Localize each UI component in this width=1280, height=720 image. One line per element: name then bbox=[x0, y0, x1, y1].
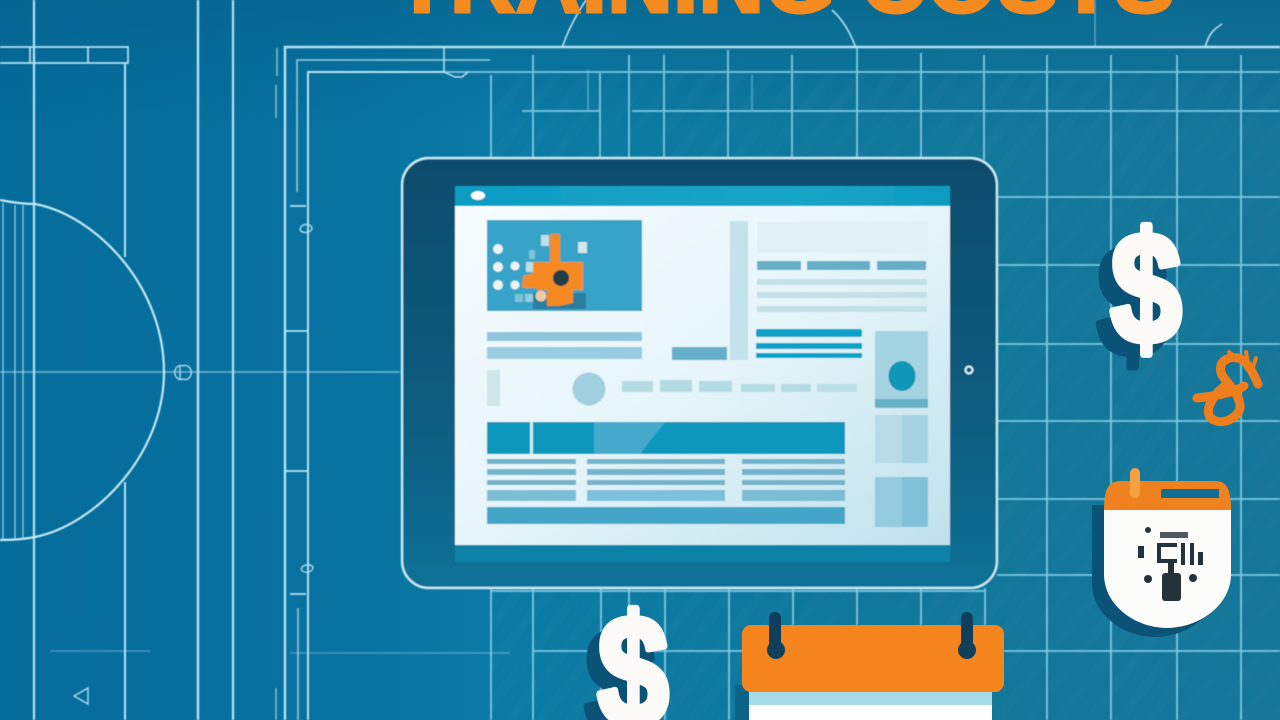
blue banner bbox=[487, 422, 845, 454]
screen bbox=[455, 186, 950, 562]
screen top bar bbox=[455, 186, 950, 207]
icon: large dollar sign right: $ bbox=[1111, 201, 1182, 377]
grid lines bbox=[308, 0, 1280, 720]
tablet bbox=[402, 158, 997, 588]
vertical stripe bbox=[730, 221, 748, 360]
icon: small orange currency symbol bbox=[1197, 352, 1258, 422]
drawing detail marks bbox=[0, 224, 510, 704]
icon: small calendar badge bbox=[1092, 468, 1231, 637]
small icon row bbox=[487, 370, 857, 406]
table rows bbox=[487, 459, 845, 501]
right tab bars bbox=[757, 261, 926, 270]
top bar dot bbox=[471, 191, 485, 200]
icon: large dollar sign right: $ bbox=[1097, 213, 1168, 389]
tag block bbox=[672, 347, 727, 360]
table footer bar bbox=[487, 507, 845, 524]
calendar glyph marks bbox=[1138, 527, 1203, 601]
left plan: vertical lines and top box bbox=[0, 0, 128, 720]
icon: large calendar bbox=[735, 612, 1004, 720]
image tile with gear bbox=[487, 220, 642, 311]
tablet home button bbox=[966, 366, 972, 374]
right heading block bbox=[757, 222, 928, 253]
blue highlight bars bbox=[756, 329, 862, 358]
right text lines bbox=[757, 279, 927, 312]
screen bottom strip bbox=[455, 540, 950, 562]
screen content area bbox=[455, 206, 950, 545]
tablet body bbox=[402, 158, 997, 588]
side cards bbox=[875, 415, 928, 527]
side profile panel bbox=[875, 331, 928, 408]
left plan: semicircular room outline bbox=[0, 200, 164, 540]
left text bars bbox=[487, 332, 642, 359]
